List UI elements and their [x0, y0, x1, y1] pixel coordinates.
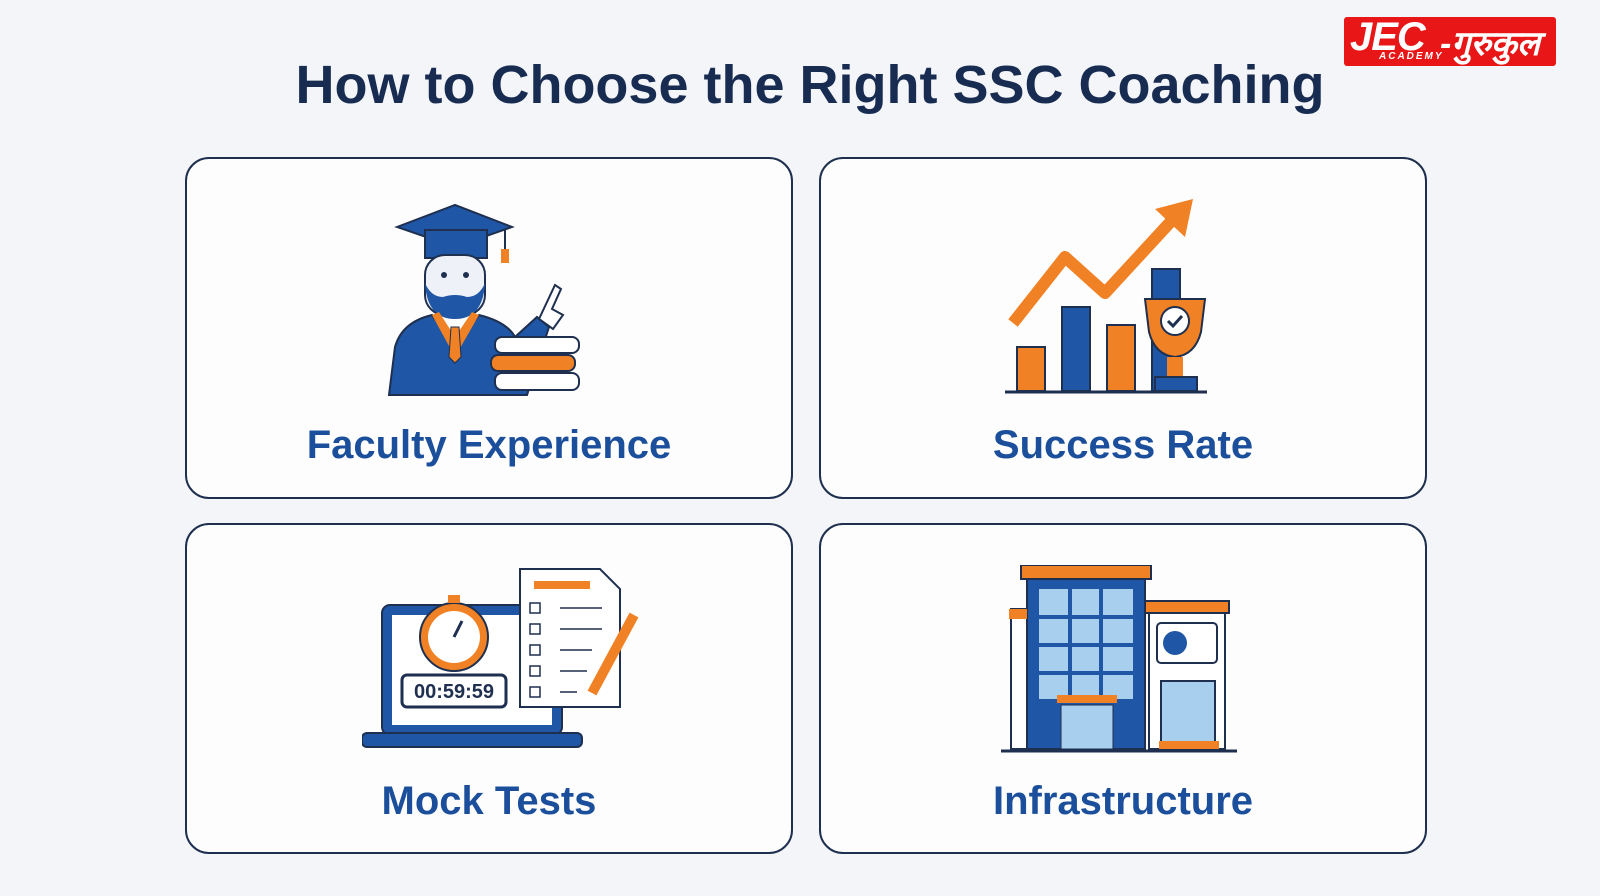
- label: Mock Tests: [382, 779, 596, 823]
- icon: building: [1001, 565, 1237, 752]
- label: Faculty Experience: [307, 423, 671, 467]
- panel: faculty experience: [185, 157, 793, 499]
- icon: laptop with stopwatch and test sheet: [362, 568, 638, 748]
- icon: chart with trophy: [1005, 199, 1207, 394]
- panel: infrastructure: [819, 523, 1427, 854]
- panel: success rate: [819, 157, 1427, 499]
- logo: ACADEMY: [1379, 51, 1444, 62]
- logo: -गुरुकुल: [1440, 25, 1540, 63]
- icon: graduate teacher: [388, 204, 580, 396]
- icon: laptop with stopwatch and test sheet: 00:59:59: [414, 681, 494, 703]
- panel: mock tests: [185, 523, 793, 854]
- logo: [1344, 17, 1556, 66]
- label: Success Rate: [993, 423, 1253, 467]
- title: How to Choose the Right SSC Coaching: [296, 55, 1324, 115]
- label: Infrastructure: [993, 779, 1253, 823]
- logo: JEC: [1350, 15, 1425, 59]
